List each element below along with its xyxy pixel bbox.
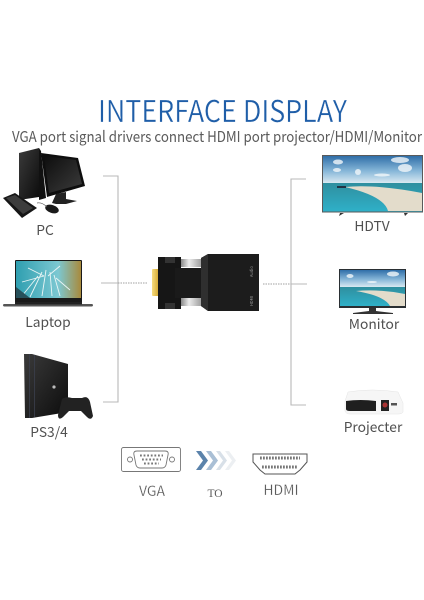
label: PS3/4: PS3/4 bbox=[30, 421, 68, 441]
label: Laptop: Laptop bbox=[25, 311, 71, 331]
icon: desktop PC bbox=[3, 148, 85, 218]
icon: VGA port bbox=[122, 448, 180, 472]
right bracket connector bbox=[263, 179, 307, 405]
adapter port labels: Audio bbox=[249, 266, 255, 277]
icon: projector bbox=[345, 390, 403, 414]
label: TO: TO bbox=[207, 488, 223, 500]
label: VGA: VGA bbox=[139, 481, 165, 501]
label: Monitor: Monitor bbox=[349, 313, 400, 333]
label: HDMI: HDMI bbox=[263, 480, 299, 500]
icon: HDMI port bbox=[253, 454, 307, 474]
icon: VGA to HDMI adapter: HDMI bbox=[249, 296, 255, 306]
icon: PS4 console and controller bbox=[24, 354, 93, 419]
icon: direction chevrons bbox=[196, 451, 236, 470]
label: PC: PC bbox=[36, 219, 54, 239]
icon: laptop bbox=[3, 260, 93, 306]
left bracket connector bbox=[101, 176, 147, 402]
label: HDTV: HDTV bbox=[354, 215, 390, 235]
label: Projecter: Projecter bbox=[344, 416, 403, 436]
icon: VGA to HDMI adapter bbox=[152, 254, 259, 311]
title: INTERFACE DISPLAY bbox=[98, 87, 347, 131]
icon: monitor bbox=[339, 269, 406, 314]
icon: HDTV bbox=[322, 155, 423, 216]
